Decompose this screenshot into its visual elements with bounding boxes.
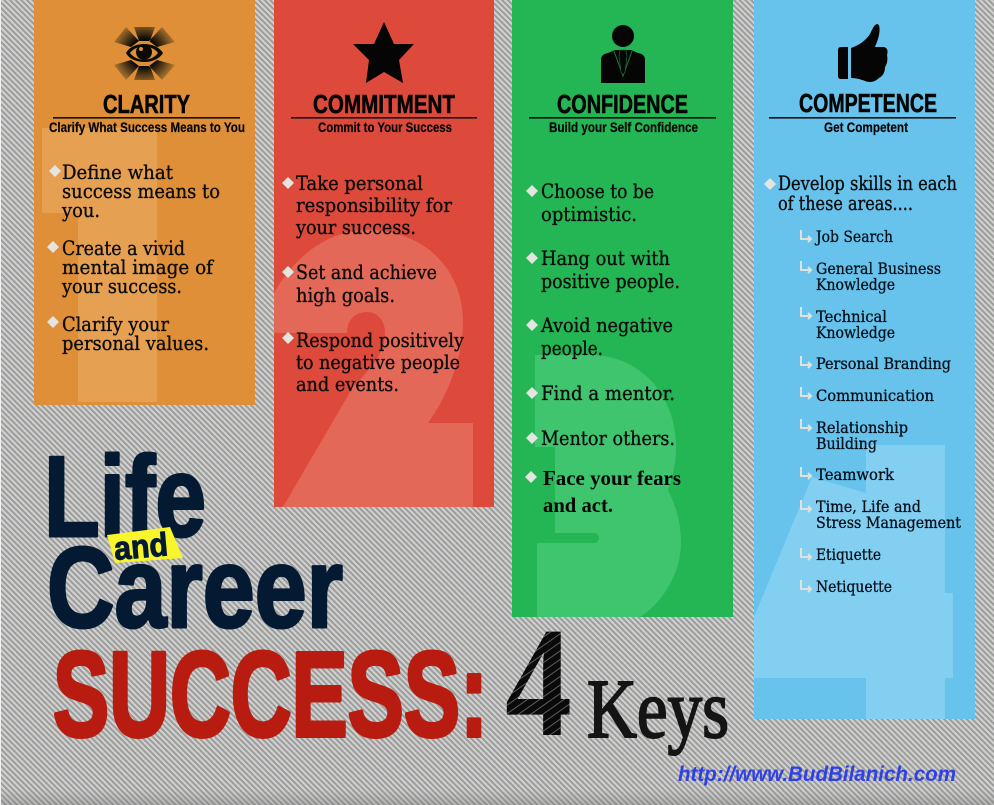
heading: confidence: CONFIDENCE <box>557 89 688 119</box>
bullet list: competence: Job Search <box>814 227 893 246</box>
icon: eye with rays <box>114 27 175 80</box>
bullet list: commitment: Take personal <box>296 171 423 195</box>
bullet list: confidence: optimistic. <box>541 202 637 226</box>
bullet list: competence: Time, Life and <box>816 497 921 516</box>
bullet list: competence: Netiquette <box>816 577 892 596</box>
title: Life and Career Success: Life <box>44 434 206 561</box>
bullet list: commitment: and events. <box>296 372 399 396</box>
panel: commitment <box>274 0 494 507</box>
subheading: confidence: Build your Self Confidence <box>549 119 698 135</box>
bullet list: competence: Knowledge <box>816 323 895 342</box>
bullet list: clarity: you. <box>61 198 100 222</box>
bullet list: competence: Building <box>816 434 877 453</box>
bullet list: commitment: Respond positively <box>296 328 465 352</box>
bullet list: commitment <box>282 171 465 396</box>
subheading: competence: Get Competent <box>824 119 908 135</box>
bullet list: competence: General Business <box>816 259 941 278</box>
subheading: commitment: Commit to Your Success <box>318 119 452 135</box>
bullet list: competence: Etiquette <box>816 545 881 564</box>
bullet list: competence <box>764 171 962 596</box>
title: 4 Keys <box>505 595 729 769</box>
bullet list: clarity: personal values. <box>62 331 209 355</box>
bullet list: commitment: to negative people <box>296 350 460 374</box>
bullet list: clarity: Define what <box>62 160 173 184</box>
icon: businessman <box>601 25 645 83</box>
numeral 4 <box>754 445 953 719</box>
bullet list: confidence: positive people. <box>541 269 680 293</box>
bullet list: competence: Develop skills in each <box>778 171 957 195</box>
title: 4 Keys: Keys <box>587 663 729 756</box>
bullet list: confidence: Find a mentor. <box>541 381 675 405</box>
numeral 2 <box>274 230 473 507</box>
bullet list: clarity: your success. <box>61 274 182 298</box>
bullet list: competence: Personal Branding <box>816 354 951 373</box>
numeral 1 <box>42 128 157 402</box>
bullet list: clarity: Clarify your <box>62 312 169 336</box>
bullet list: confidence: Hang out with <box>541 246 670 270</box>
bullet list: confidence: Face your fears <box>543 466 681 490</box>
bullet list: competence: Relationship <box>816 418 908 437</box>
website url: http://www.BudBilanich.com <box>678 763 956 786</box>
bullet list: confidence: Avoid negative <box>540 313 673 337</box>
bullet list: competence: Knowledge <box>816 275 895 294</box>
heading: competence: COMPETENCE <box>799 88 937 118</box>
bullet list: commitment: your success. <box>295 215 416 239</box>
bullet list: clarity: mental image of <box>62 255 214 279</box>
title: Life and Career Success <box>44 434 488 762</box>
heading: clarity: CLARITY <box>103 89 190 119</box>
bullet list: confidence: people. <box>541 336 603 360</box>
bullet list: confidence: Mentor others. <box>541 426 675 450</box>
bullet list: commitment: Set and achieve <box>296 260 437 284</box>
title: Life and Career Success: Career <box>47 525 343 652</box>
numeral 3 <box>535 355 681 617</box>
bullet list: clarity: success means to <box>62 179 220 203</box>
bullet list: confidence: and act. <box>543 493 613 517</box>
tag: and: and <box>112 525 169 567</box>
bullet list: competence: Communication <box>816 386 934 405</box>
bullet list: competence: of these areas.... <box>778 191 913 215</box>
title: 4 Keys: 4 <box>505 595 572 769</box>
bullet list: competence: Teamwork <box>816 465 894 484</box>
panel: competence <box>754 0 975 719</box>
bullet list: confidence <box>525 179 681 517</box>
heading: commitment: COMMITMENT <box>313 89 455 119</box>
bullet list: confidence: Choose to be <box>541 179 654 203</box>
panel: clarity <box>34 0 255 405</box>
bullet list: competence: Technical <box>816 307 887 326</box>
panel: confidence <box>512 0 733 617</box>
bullet list: clarity <box>47 160 220 355</box>
bullet list: commitment: responsibility for <box>296 193 452 217</box>
icon: thumbs up <box>838 24 888 82</box>
subheading: clarity: Clarify What Success Means to You <box>49 119 245 135</box>
icon: star <box>353 22 414 83</box>
bullet list: competence: Stress Management <box>816 513 962 532</box>
bullet list: commitment: high goals. <box>296 283 395 307</box>
title: Life and Career Success: SUCCESS: <box>53 626 488 762</box>
bullet list: clarity: Create a vivid <box>62 236 185 260</box>
